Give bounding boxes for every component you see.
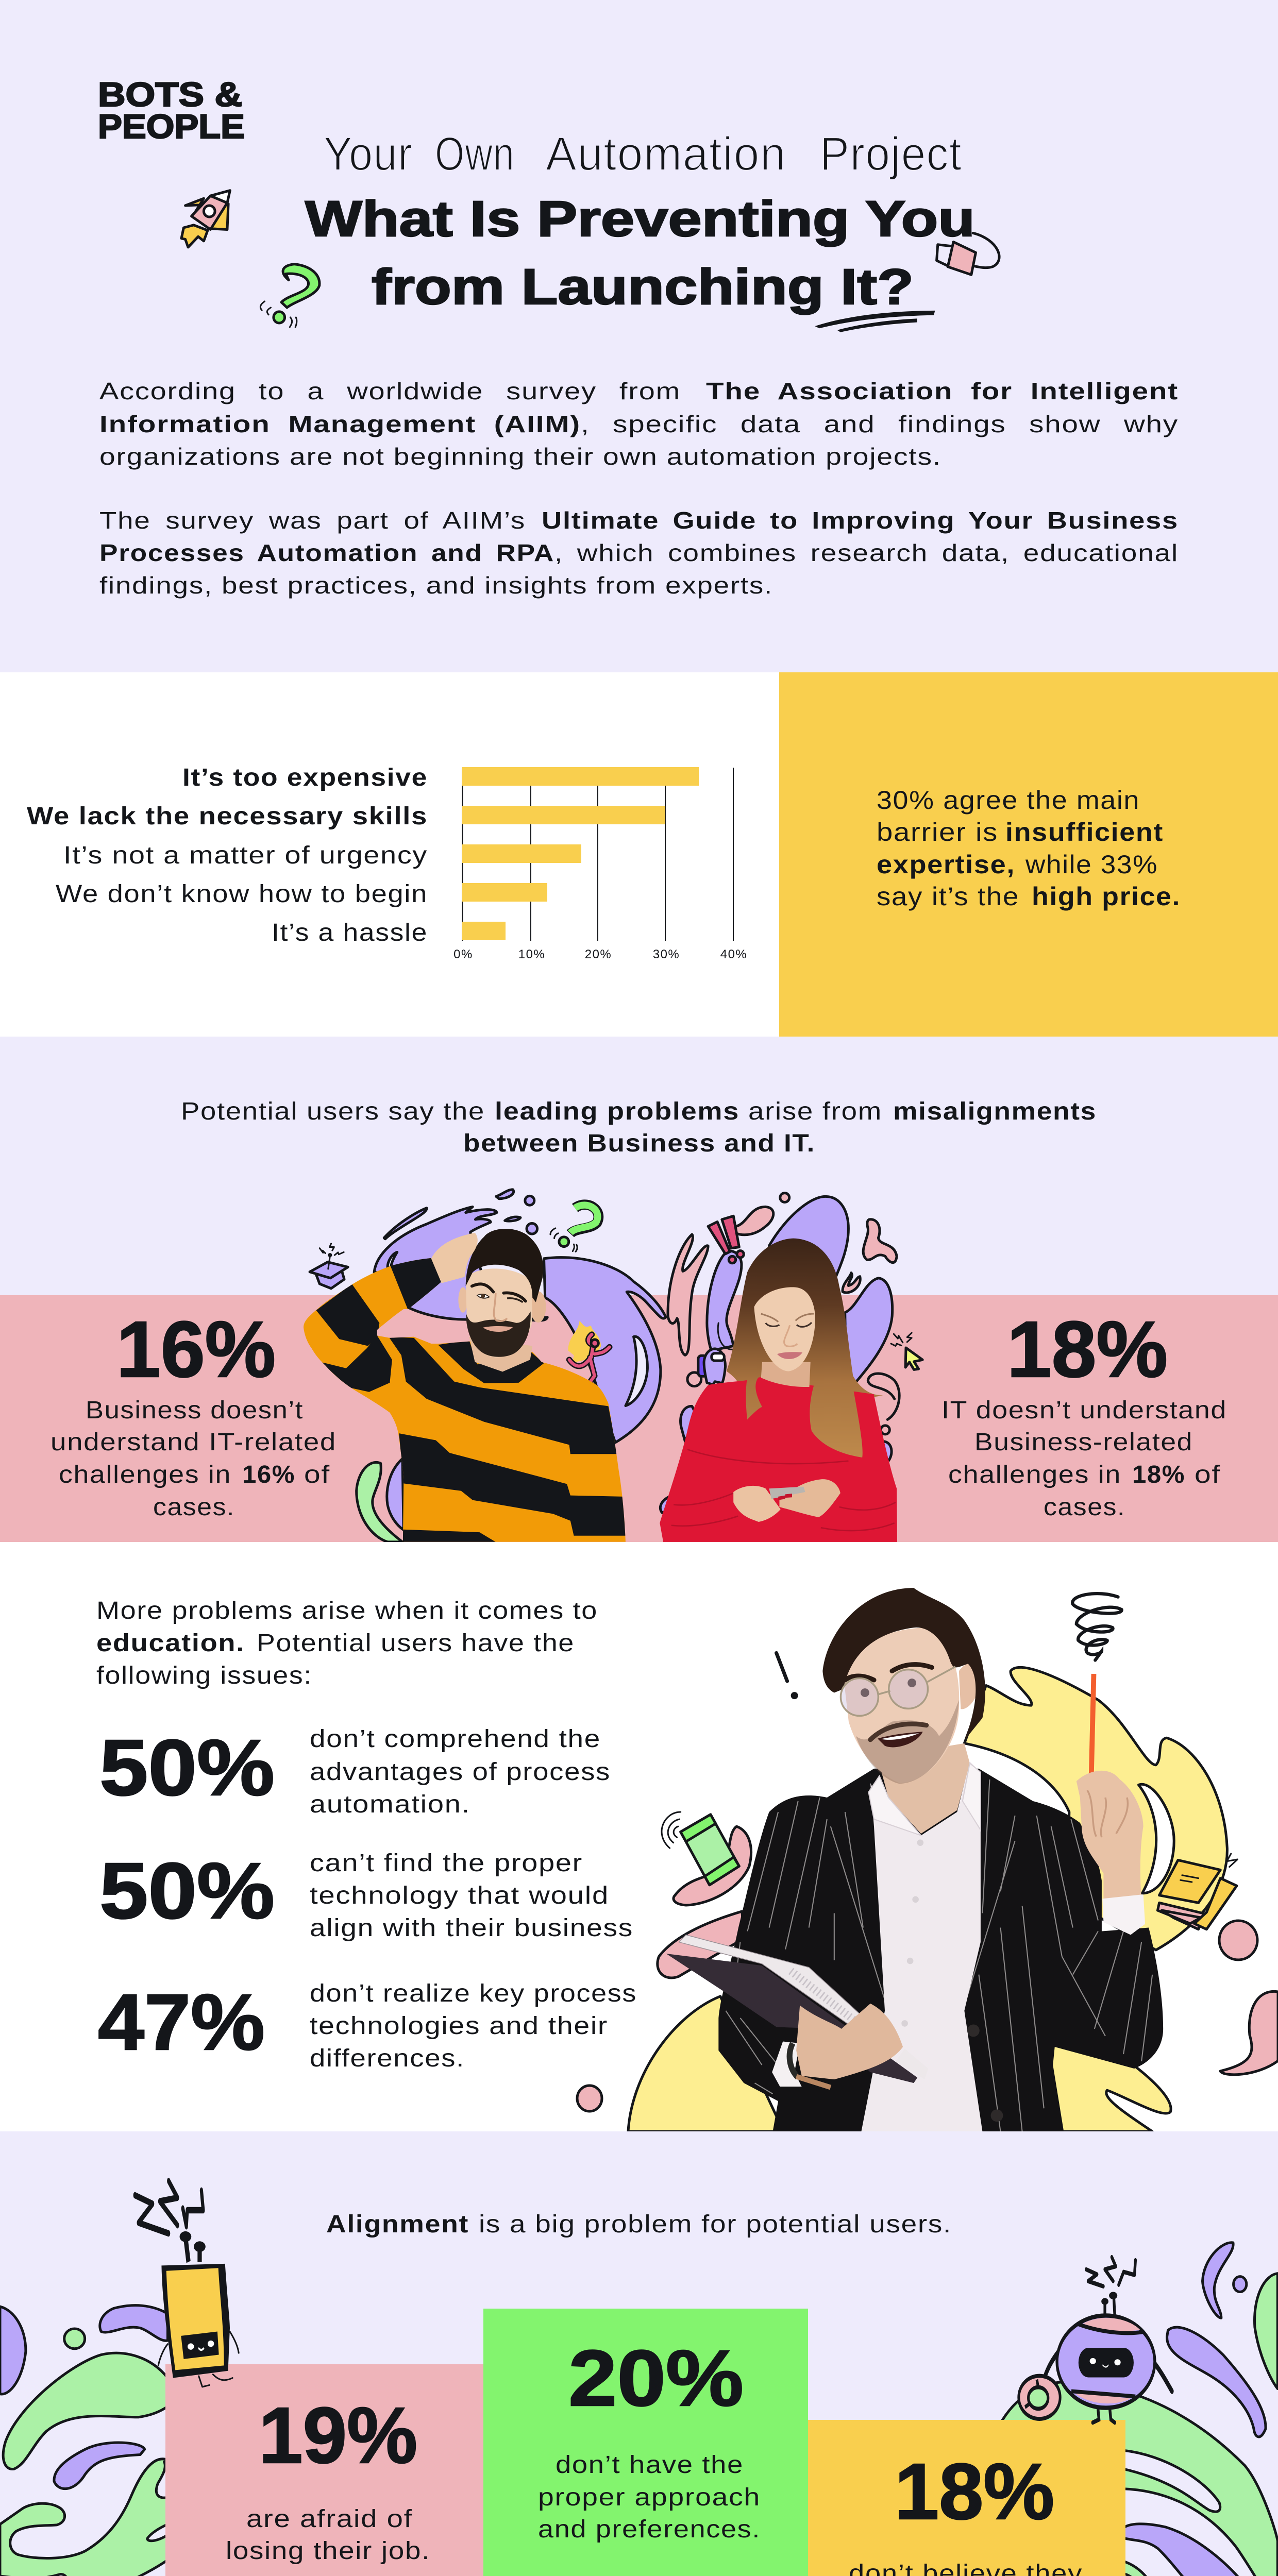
stat text left: challenges in [59, 1461, 231, 1488]
title: from Launching It? [372, 259, 914, 315]
hand holding notebooks [772, 2004, 903, 2088]
callout text: while 33% [1025, 850, 1158, 879]
stat text: advantages of process [310, 1758, 611, 1786]
doodle: pink ball [1219, 1921, 1257, 1960]
doodle: pink outline swirl [868, 1374, 899, 1419]
chart axis labels: 10% [518, 947, 545, 961]
striped sweater [298, 1254, 631, 1542]
chart category labels: It’s too expensive [182, 764, 428, 791]
pencil [1091, 1674, 1094, 1794]
illustration: man scratching head [298, 1190, 666, 1542]
card text [226, 2505, 430, 2565]
jacket buttons [967, 2025, 1003, 2122]
stat text right: 18% [1132, 1461, 1185, 1488]
intro paragraph 2: Processes Automation and RPA [99, 539, 554, 566]
icon: rocket [181, 191, 230, 247]
doodle: white crescent [1138, 1784, 1174, 1893]
stat text right: challenges in [948, 1461, 1121, 1488]
stat text right [941, 1397, 1227, 1521]
callout text: 30% agree the main [877, 786, 1140, 815]
doodle: lavender lower blob [387, 1459, 403, 1530]
intro paragraph 1: The Association for Intelligent [706, 378, 1179, 404]
doodle: green tail [357, 1462, 402, 1542]
stat: 50% comprehend: 50% [99, 1723, 275, 1812]
callout text: insufficient [1005, 818, 1164, 846]
chart category labels: It’s not a matter of urgency [63, 842, 428, 869]
callout text: say it’s the [877, 882, 1019, 911]
hair back [727, 1239, 883, 1459]
alignment intro: Alignment [326, 2211, 469, 2238]
education intro: education. [96, 1630, 245, 1657]
icon: green question mark [260, 264, 320, 327]
intro paragraph 2 [99, 507, 1179, 599]
icon: running person on fire [568, 1320, 610, 1382]
chart axis labels: 40% [720, 947, 747, 961]
pinstripes [726, 1780, 1152, 2131]
underline brush strokes [815, 311, 935, 332]
subtitle: Your [324, 128, 413, 180]
icon: green question mark [550, 1205, 598, 1251]
card: 18% [808, 2420, 1125, 2576]
doodle: pink dot [780, 1193, 789, 1202]
misalignment intro text: arise from [748, 1098, 882, 1125]
stat text: align with their business [310, 1914, 633, 1942]
doodle: lavender tall blob [707, 1251, 742, 1350]
doodle: pink arm blob [658, 1911, 744, 1978]
icon: books [1157, 1854, 1237, 1929]
panel: yellow callout [779, 672, 1278, 1037]
logo: Bots & People: PEOPLE [98, 107, 245, 145]
subtitle: Project [820, 128, 962, 180]
bar chart [27, 764, 747, 961]
shirt [861, 1761, 982, 2131]
doodle: droplets [496, 1190, 537, 1234]
education intro: following issues: [96, 1662, 312, 1689]
education intro: More problems arise when it comes to [96, 1597, 598, 1624]
title: What Is Preventing You [305, 191, 975, 247]
chart axis labels: 30% [653, 947, 680, 961]
doodle: pink blob top [736, 1207, 773, 1235]
stat: 47%: 47% [98, 1978, 265, 2066]
stat text: technologies and their [310, 2012, 608, 2040]
callout text: barrier is [877, 818, 998, 846]
collar [868, 1763, 981, 1836]
header section [98, 75, 999, 332]
doodle: lavender sliver [384, 1208, 427, 1239]
intro paragraph 2: Ultimate Guide to Improving Your Business [542, 507, 1179, 534]
sweater rib texture [671, 1449, 896, 1531]
chart category labels: We lack the necessary skills [27, 803, 428, 830]
neck [878, 1743, 970, 1834]
doodle: yellow lower left blob [628, 1996, 784, 2131]
card text: proper approach [538, 2484, 761, 2511]
icon: crewmate [687, 1349, 726, 1386]
neck and head [458, 1229, 546, 1371]
panel: pink band [0, 1295, 1278, 1542]
card text: and preferences. [538, 2516, 761, 2543]
icon: green phone [662, 1812, 739, 1885]
stat text: technology that would [310, 1882, 609, 1909]
misalignment intro text: Potential users say the [181, 1098, 485, 1125]
red sweater [660, 1377, 897, 1542]
doodles: left green and purple splashes [0, 2306, 167, 2576]
doodle: yellow upper blob [964, 1667, 1227, 1950]
intro paragraph 1: According to a worldwide survey from [99, 378, 681, 404]
doodle: pink shapes on the right [843, 1219, 897, 1293]
stat text: don’t comprehend the [310, 1725, 601, 1753]
chart category labels [27, 764, 428, 946]
stat: 16% [51, 1305, 337, 1521]
title [305, 191, 975, 315]
stat: 50% technology: 50% [99, 1846, 275, 1935]
notebooks [666, 1935, 928, 2083]
stat: 16%: 16% [116, 1305, 276, 1394]
stat: 50% technology [99, 1846, 633, 1942]
doodle: lavender splash behind head [374, 1207, 547, 1323]
raised hand [1077, 1771, 1144, 1908]
alignment intro: is a big problem for potential users. [479, 2211, 952, 2238]
icon: usb plug [937, 233, 999, 275]
icon: round purple robot [1019, 2257, 1172, 2422]
doodle: yellow lower right blob [1037, 1993, 1171, 2131]
stat text right: Business-related [974, 1429, 1193, 1456]
intro paragraph 2: findings, best practices, and insights from experts. [99, 572, 773, 599]
icon: yellow robot [135, 2181, 239, 2387]
hand on head [431, 1233, 478, 1283]
jacket [718, 1769, 1163, 2131]
intro paragraph 2: The survey was part of AIIM’s [99, 507, 526, 534]
card text: don’t have the [556, 2451, 744, 2479]
card text: are afraid of [246, 2505, 413, 2533]
stat text left: of [304, 1461, 330, 1488]
raised arm cuff [1102, 1894, 1145, 1935]
doodle: big lavender swirl [544, 1258, 666, 1443]
stat: 18%: 18% [1007, 1305, 1168, 1394]
doodle: exclamation mark [777, 1653, 798, 1699]
chart axis labels [453, 947, 747, 961]
hands and phone [733, 1479, 840, 1522]
panel: alignment section background [0, 2131, 1278, 2576]
card: 20%: 20% [568, 2334, 744, 2422]
stat text left: Business doesn’t [86, 1397, 304, 1424]
stat text: differences. [310, 2045, 465, 2072]
stat: 50% comprehend [99, 1723, 611, 1818]
subtitle [324, 128, 962, 180]
card: 19% [165, 2364, 483, 2576]
intro paragraph 2: , which combines research data, educational [554, 539, 1179, 566]
illustration: woman with phone [660, 1193, 922, 1542]
panel: education white section [0, 1542, 1278, 2131]
icon: cursor [891, 1333, 922, 1369]
stat: 18% [941, 1305, 1227, 1521]
doodle: pink dot [577, 2086, 602, 2111]
doodle: lavender lower blobs [681, 1406, 697, 1442]
doodle: pink tail [1220, 1991, 1278, 2075]
education intro: Potential users have the [257, 1630, 575, 1657]
card: 20% [483, 2309, 808, 2576]
stat text right: of [1195, 1461, 1221, 1488]
illustration: man with glasses [628, 1588, 1227, 2131]
chart axis labels: 0% [453, 947, 473, 961]
doodle: lavender blob right [845, 1278, 893, 1383]
stat text [310, 1725, 611, 1818]
doodle: tornado squiggle [1072, 1594, 1122, 1660]
alignment intro [326, 2211, 952, 2238]
neck [761, 1362, 811, 1387]
misalignment intro text: misalignments [893, 1098, 1097, 1125]
doodle: large lavender blob [769, 1196, 848, 1277]
logo: Bots & People [98, 75, 245, 145]
chart category labels: It’s a hassle [272, 919, 428, 946]
stat text: can’t find the proper [310, 1850, 583, 1877]
doodle: pink dripping blob [668, 1234, 708, 1355]
callout text: expertise, [877, 850, 1015, 879]
intro paragraph 1: Information Management (AIIM) [99, 411, 581, 437]
doodle: pink blob under phone [674, 1826, 751, 1905]
card text [538, 2451, 761, 2543]
head [822, 1588, 985, 1784]
stat: 47% [98, 1978, 637, 2072]
subtitle: Own [435, 128, 515, 180]
chart category labels: We don’t know how to begin [56, 880, 428, 908]
callout text [877, 786, 1181, 911]
subtitle: Automation [546, 128, 786, 180]
card text: losing their job. [226, 2537, 430, 2565]
logo: Bots & People: BOTS & [98, 75, 242, 113]
doodles: right green and purple splashes [969, 2243, 1277, 2576]
stat text: don’t realize key process [310, 1980, 637, 2007]
stat text left: cases. [153, 1494, 235, 1521]
stat text right: cases. [1044, 1494, 1125, 1521]
front hair strands [746, 1360, 863, 1458]
stat text [310, 1850, 633, 1942]
stat text left [51, 1397, 337, 1521]
callout text: high price. [1032, 882, 1181, 911]
stat text [310, 1980, 637, 2072]
education intro [96, 1597, 598, 1689]
stat text left: understand IT-related [51, 1429, 337, 1456]
stat text left: 16% [242, 1461, 295, 1488]
intro paragraph 1: , specific data and findings show why [581, 411, 1179, 437]
chart axis labels: 20% [585, 947, 612, 961]
misalignment intro text: between Business and IT. [463, 1130, 815, 1157]
panel: barriers chart [0, 672, 779, 1037]
card: 19%: 19% [259, 2391, 417, 2480]
intro paragraph 1: organizations are not beginning their own automation projects. [99, 443, 941, 470]
face [754, 1287, 815, 1371]
stat text: automation. [310, 1791, 470, 1818]
stat text right: IT doesn’t understand [941, 1397, 1227, 1424]
icon: graduation cap box [310, 1244, 348, 1289]
intro paragraph 1 [99, 378, 1179, 470]
misalignment intro text: leading problems [495, 1098, 739, 1125]
misalignment intro text [181, 1098, 1097, 1157]
shirt buttons [901, 1839, 923, 2027]
card: 18%: 18% [895, 2447, 1054, 2536]
icon: exclamation marks [708, 1216, 744, 1263]
